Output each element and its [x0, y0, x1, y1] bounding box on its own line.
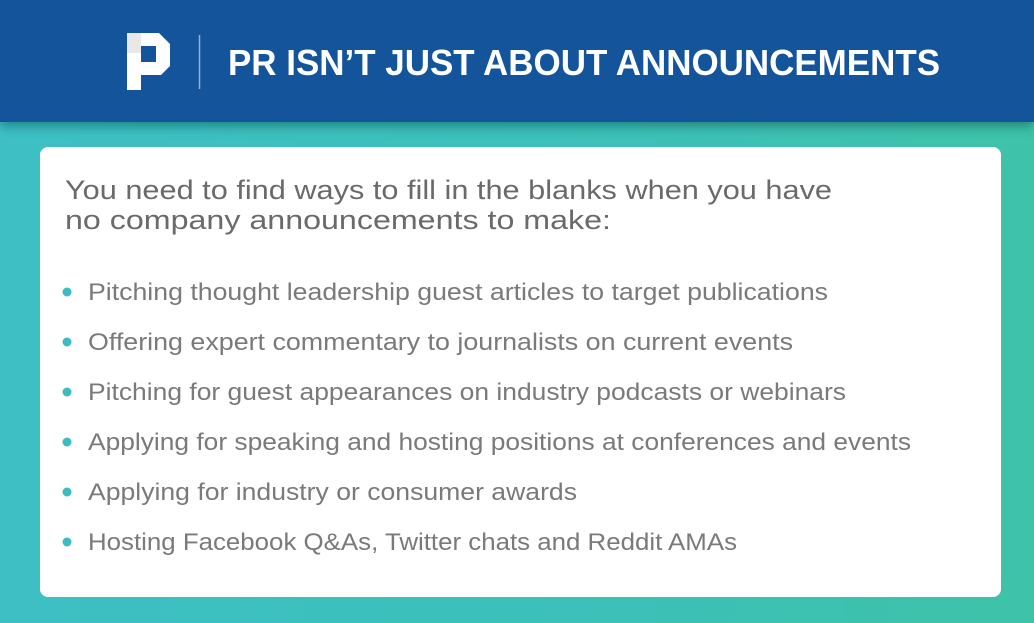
title: PR ISN’T JUST ABOUT ANNOUNCEMENTS	[228, 42, 940, 83]
bullet list: Applying for industry or consumer awards	[88, 479, 577, 506]
bullet list: Pitching thought leadership guest articles to target publications	[88, 279, 828, 306]
panel: content card	[40, 147, 1001, 597]
icon: logo	[127, 33, 170, 90]
intro text	[65, 175, 832, 235]
bullet list: Applying for speaking and hosting positions at conferences and events	[88, 429, 911, 456]
bullet list: Hosting Facebook Q&As, Twitter chats and Reddit AMAs	[88, 529, 737, 556]
header bar	[0, 0, 1034, 122]
intro text: no company announcements to make:	[65, 205, 611, 235]
intro text: You need to find ways to fill in the blanks when you have	[65, 175, 832, 205]
bullet list: Pitching for guest appearances on industry podcasts or webinars	[88, 379, 846, 406]
divider	[198, 35, 200, 89]
bullet list	[62, 279, 911, 556]
bullet list: Offering expert commentary to journalists on current events	[88, 329, 793, 356]
